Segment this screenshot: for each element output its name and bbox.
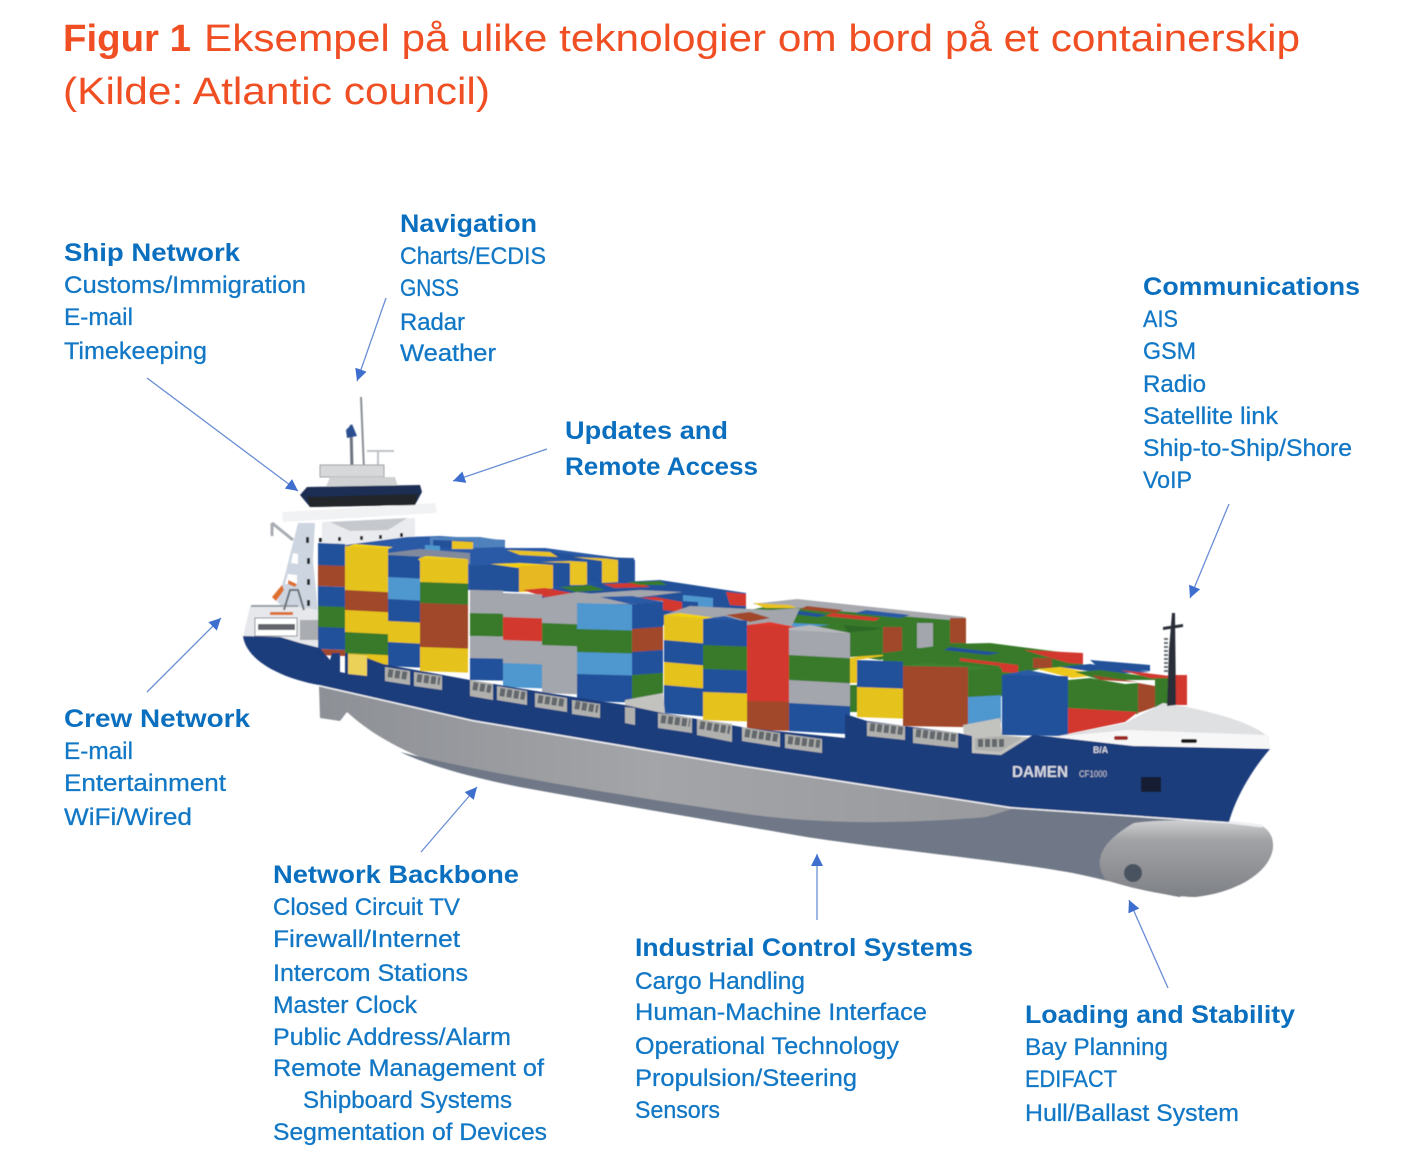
arrow: crew network bbox=[147, 618, 221, 692]
ship: stern deck bbox=[243, 606, 318, 650]
label: communications: GSM bbox=[1143, 338, 1196, 365]
ship: draft marks: B/A bbox=[1093, 745, 1108, 755]
ship: bridge wing deck bbox=[282, 503, 437, 522]
label: communications: Radio bbox=[1143, 371, 1206, 398]
illustration: container ship bbox=[243, 397, 1273, 897]
label: ship network: Customs/Immigration bbox=[64, 272, 306, 299]
label: crew network: E-mail bbox=[64, 738, 133, 765]
label: network backbone: Shipboard Systems bbox=[303, 1087, 512, 1114]
arrow: ship network bbox=[147, 378, 298, 491]
label: ship network: E-mail bbox=[64, 304, 133, 331]
ship: forecastle bbox=[1053, 703, 1270, 748]
label: communications: AIS bbox=[1143, 306, 1178, 333]
label: navigation: Radar bbox=[400, 309, 465, 336]
ship: back rows of containers, fore bbox=[883, 643, 1187, 713]
ship: mid container stacks bbox=[664, 606, 883, 734]
label: crew network bbox=[64, 705, 250, 831]
label: crew network: WiFi/Wired bbox=[64, 804, 192, 831]
label: communications: Communications bbox=[1143, 273, 1360, 301]
ship: second row, amidships bbox=[523, 580, 746, 625]
ship: light deck behind hatches bbox=[625, 693, 1035, 757]
ship: forecastle lights bbox=[1114, 736, 1128, 740]
ship: hatch openings bbox=[385, 667, 1022, 753]
label: communications: Satellite link bbox=[1143, 403, 1279, 430]
label: industrial control systems: Industrial Control Systems bbox=[635, 934, 973, 962]
label: ship network: Timekeeping bbox=[64, 338, 207, 365]
ship: blue upper hull bbox=[243, 636, 1270, 822]
ship: bridge bbox=[300, 485, 422, 507]
ship: underdeck bbox=[330, 518, 407, 531]
label: network backbone: Network Backbone bbox=[273, 861, 519, 889]
ship: forward container stacks bbox=[857, 660, 1155, 736]
arrow: industrial control systems bbox=[816, 854, 818, 920]
label: navigation: Navigation bbox=[400, 210, 537, 238]
label: loading and stability: Bay Planning bbox=[1025, 1034, 1168, 1061]
ship: back rows of containers, aft bbox=[345, 536, 635, 590]
label: crew network: Crew Network bbox=[64, 705, 250, 733]
ship: back rows of containers, mid bbox=[750, 599, 966, 712]
title: (Kilde: Atlantic council) bbox=[63, 71, 490, 113]
arrow: loading and stability bbox=[1129, 900, 1168, 988]
ship: top row bbox=[470, 557, 634, 592]
arrow: network backbone bbox=[421, 787, 477, 852]
label: navigation: GNSS bbox=[400, 275, 459, 302]
label: network backbone: Intercom Stations bbox=[273, 960, 468, 987]
ship: bulbous bow bbox=[1100, 820, 1273, 897]
arrow: navigation bbox=[357, 298, 386, 381]
ship: hull model: CF1000 bbox=[1079, 769, 1107, 779]
label: loading and stability: Loading and Stability bbox=[1025, 1001, 1295, 1029]
label: industrial control systems: Operational Technology bbox=[635, 1033, 899, 1060]
arrow: updates and remote access bbox=[453, 449, 547, 481]
label: updates and remote access: Remote Access bbox=[565, 453, 758, 481]
ship: dark waterline band bbox=[400, 752, 1262, 897]
label: communications: VoIP bbox=[1143, 467, 1192, 494]
ship: lifeboat bbox=[270, 580, 297, 615]
label: network backbone bbox=[273, 861, 547, 1146]
ship: bow thruster bbox=[1124, 864, 1142, 882]
label: ship network bbox=[64, 239, 306, 365]
ship: hull name: DAMEN bbox=[1012, 764, 1068, 781]
ship: anchor pocket bbox=[1141, 777, 1161, 792]
title: Eksempel på ulike teknologier om bord på et containerskip bbox=[204, 18, 1300, 60]
label: navigation: Weather bbox=[400, 340, 496, 367]
ship: rudder and lower hull bbox=[319, 686, 1273, 897]
label: updates and remote access: Updates and bbox=[565, 417, 728, 445]
label: network backbone: Closed Circuit TV bbox=[273, 894, 460, 921]
label: network backbone: Remote Management of bbox=[273, 1055, 544, 1082]
ship: tower bbox=[322, 518, 415, 560]
label: communications bbox=[1143, 273, 1360, 494]
title: Figur 1 bbox=[63, 18, 191, 60]
label: updates and remote access bbox=[565, 417, 758, 481]
title bbox=[63, 18, 1300, 113]
label: industrial control systems: Cargo Handling bbox=[635, 968, 805, 995]
label: network backbone: Segmentation of Devices bbox=[273, 1119, 547, 1146]
label: industrial control systems bbox=[635, 934, 973, 1124]
label: loading and stability: EDIFACT bbox=[1025, 1066, 1117, 1093]
label: communications: Ship-to-Ship/Shore bbox=[1143, 435, 1352, 462]
ship: aft container stacks bbox=[318, 543, 664, 702]
ship: tower frame bbox=[277, 523, 318, 620]
label: crew network: Entertainment bbox=[64, 770, 226, 797]
label: navigation: Charts/ECDIS bbox=[400, 243, 546, 270]
label: industrial control systems: Sensors bbox=[635, 1097, 720, 1124]
label: ship network: Ship Network bbox=[64, 239, 240, 267]
ship: davit crane bbox=[272, 523, 293, 540]
label: network backbone: Master Clock bbox=[273, 992, 418, 1019]
label: loading and stability: Hull/Ballast System bbox=[1025, 1100, 1239, 1127]
arrow: communications bbox=[1190, 504, 1229, 598]
label: industrial control systems: Propulsion/Steering bbox=[635, 1065, 857, 1092]
ship: foremast bbox=[1163, 613, 1183, 706]
ship: tower windows bbox=[306, 533, 403, 606]
label: network backbone: Public Address/Alarm bbox=[273, 1024, 511, 1051]
label: network backbone: Firewall/Internet bbox=[273, 926, 460, 953]
ship: white boot line bbox=[319, 685, 1262, 826]
label: navigation bbox=[400, 210, 546, 367]
ship: masts and radar bbox=[320, 397, 398, 487]
label: loading and stability bbox=[1025, 1001, 1295, 1127]
label: industrial control systems: Human-Machine Interface bbox=[635, 999, 927, 1026]
